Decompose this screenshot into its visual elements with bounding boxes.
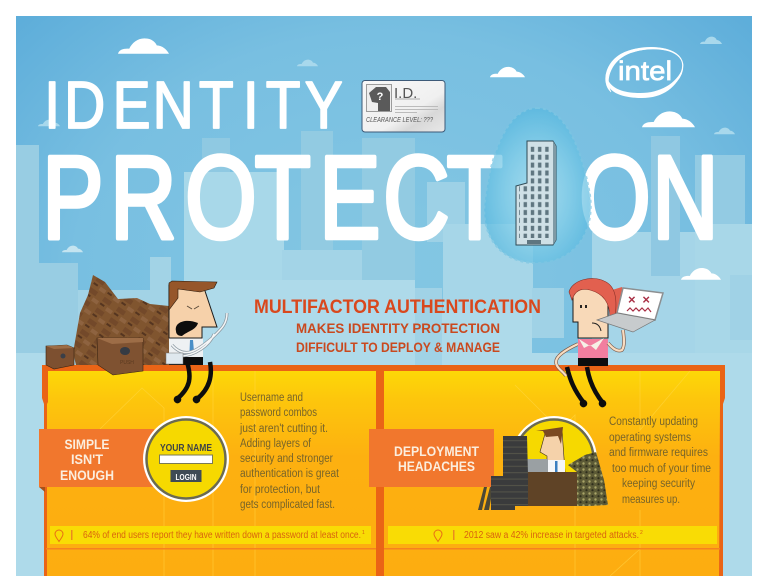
body text: security and stronger — [240, 453, 333, 465]
icon: ID card: CLEARANCE LEVEL: ??? — [366, 117, 433, 124]
mouth — [592, 323, 601, 331]
logo: intel: intel — [618, 56, 672, 86]
blouse — [578, 339, 608, 358]
icon: login badge: LOGIN — [176, 473, 197, 482]
small box — [46, 345, 74, 369]
illustration: worker at desk — [478, 416, 608, 510]
icon: login badge: YOUR NAME — [160, 443, 212, 454]
circuit lines — [515, 371, 690, 576]
icon: protective bubble — [484, 108, 591, 263]
ribbon: simple isn't enough: ENOUGH — [60, 468, 114, 483]
heading: MAKES IDENTITY PROTECTION — [296, 320, 500, 336]
ponytail — [611, 287, 624, 318]
body text: measures up. — [622, 494, 680, 506]
title: IDENTITY: IDENTITY — [44, 69, 343, 143]
title: PROTECTION: PROTECTI ON — [42, 132, 719, 264]
laptop: ×× — [628, 292, 650, 307]
body text: and firmware requires — [609, 447, 708, 459]
character: worried woman — [556, 278, 663, 407]
stat bar: 2 — [640, 530, 643, 536]
body text: keeping security — [622, 478, 695, 490]
ribbon: deployment headaches: DEPLOYMENT — [394, 444, 480, 459]
right arm — [608, 330, 624, 351]
head and neck — [573, 287, 608, 338]
body text: Constantly updating — [609, 416, 698, 428]
logo: intel — [606, 47, 683, 98]
icon: login badge — [143, 416, 229, 502]
body text: just aren't cutting it. — [239, 423, 328, 435]
body text: too much of your time — [612, 463, 711, 475]
icon: ID card: ? — [377, 91, 384, 103]
head — [169, 285, 217, 338]
worker — [536, 427, 565, 473]
character: frustrated man — [166, 281, 227, 403]
ribbon: deployment headaches — [369, 429, 494, 487]
badge — [166, 353, 183, 364]
stat bar — [388, 526, 717, 544]
legs — [567, 367, 603, 403]
eyes — [581, 305, 586, 308]
icon: ID card: I.D. — [394, 85, 417, 102]
body text: Adding layers of — [240, 438, 312, 450]
clutter pile — [568, 452, 608, 506]
feet — [174, 396, 200, 403]
desk — [527, 472, 577, 506]
city skyline — [16, 131, 752, 576]
ribbon: simple isn't enough — [39, 429, 154, 492]
body text — [609, 416, 711, 506]
tie — [190, 340, 194, 355]
legs — [177, 362, 211, 399]
ribbon: simple isn't enough: SIMPLE — [64, 437, 110, 452]
feet — [580, 400, 606, 407]
shirt — [169, 338, 203, 358]
clouds — [38, 37, 735, 280]
stat bar — [50, 526, 371, 544]
stat bar: 64% of end users report they have written down a password at least once. — [83, 530, 361, 541]
large box: PUSH — [120, 360, 134, 366]
panel frame — [42, 365, 725, 576]
panel: deployment headaches — [369, 371, 720, 576]
icon: ID card — [362, 80, 445, 132]
stat bar: 2012 saw a 42% increase in targeted attacks. — [464, 530, 639, 541]
icon: office tower — [516, 141, 556, 245]
body text: password combos — [240, 407, 317, 419]
body text: for protection, but — [240, 484, 321, 496]
heading: DIFFICULT TO DEPLOY & MANAGE — [296, 339, 500, 355]
body text: Username and — [240, 392, 303, 404]
heading — [254, 297, 541, 355]
hair — [569, 278, 616, 318]
left arm — [556, 344, 578, 376]
circuit lines — [100, 371, 376, 576]
ribbon: simple isn't enough: ISN'T — [71, 452, 104, 467]
body text: authentication is great — [240, 468, 340, 480]
ribbon: deployment headaches: HEADACHES — [398, 459, 475, 474]
heading: MULTIFACTOR AUTHENTICATION — [254, 297, 541, 318]
angry eyes — [187, 306, 199, 309]
panel: simple isn't enough — [39, 371, 376, 576]
badge circle — [518, 416, 597, 472]
arms — [172, 313, 227, 356]
laptop — [527, 459, 548, 473]
stat bar: 1 — [362, 530, 365, 536]
mouth — [176, 321, 198, 336]
illustration: box pile — [46, 275, 169, 375]
body text: operating systems — [609, 432, 691, 444]
body text: gets complicated fast. — [240, 499, 335, 511]
hair — [169, 281, 217, 310]
body text — [239, 392, 340, 511]
tool stacks — [478, 436, 528, 510]
